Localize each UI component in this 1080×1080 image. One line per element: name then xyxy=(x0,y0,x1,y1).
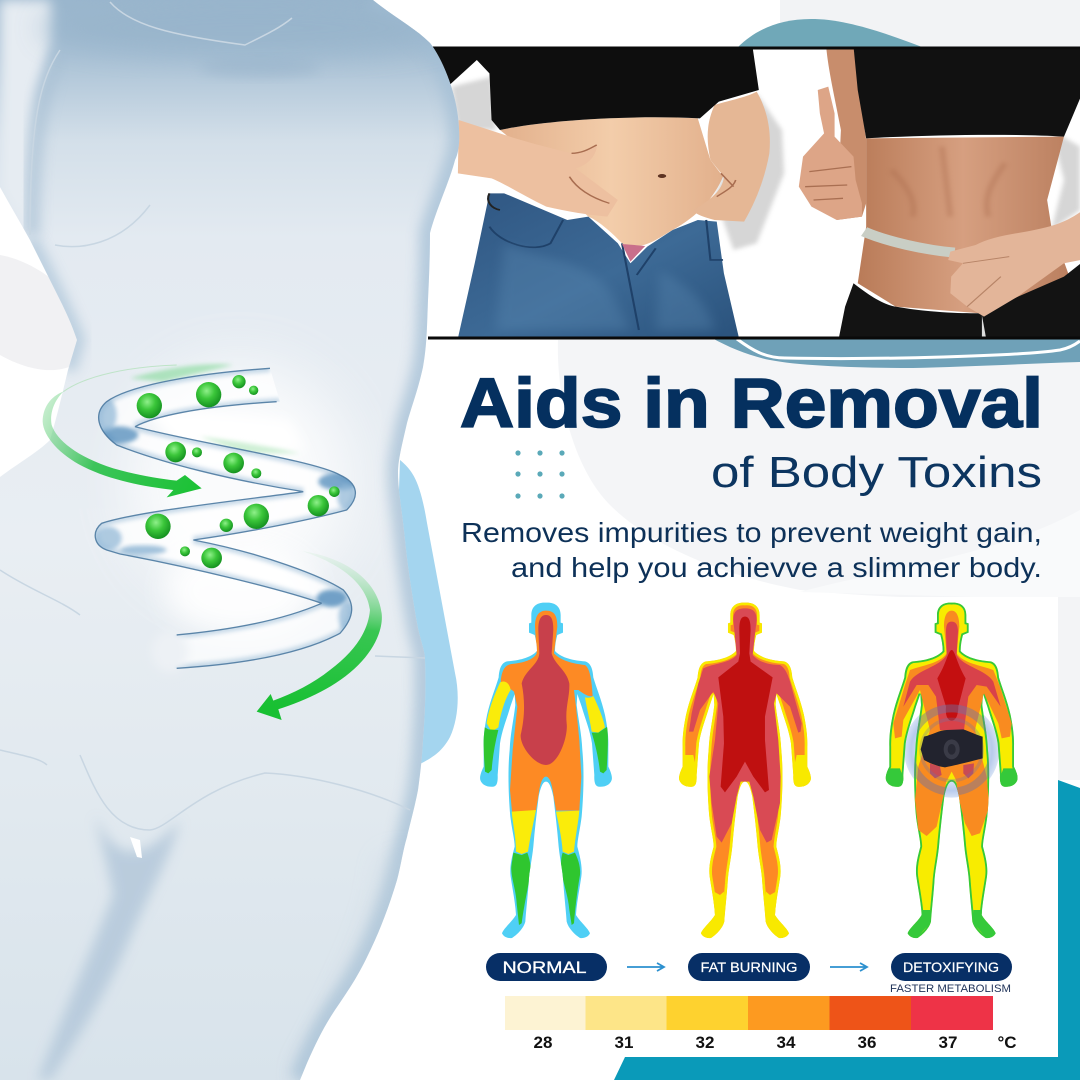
temperature scale labels: 32 xyxy=(696,1033,714,1052)
temperature scale labels: 36 xyxy=(858,1033,876,1052)
label pill: detoxifying: DETOXIFYING xyxy=(903,959,999,975)
orange region xyxy=(893,611,1012,836)
body illustration: pale blue female torso xyxy=(0,0,460,1080)
red outer region xyxy=(689,608,802,843)
dark red core xyxy=(937,650,966,721)
red hip remnants xyxy=(930,763,974,778)
dark red core xyxy=(718,617,773,792)
description text: and help you achievve a slimmer body. xyxy=(511,552,1042,583)
figure: right woman's black pants xyxy=(839,263,1080,338)
vibration rings over body xyxy=(910,708,993,792)
right side body edge shading xyxy=(300,0,459,1080)
leg crease shadow xyxy=(38,815,180,1080)
label pill: fat burning: FAT BURNING xyxy=(700,959,798,975)
slimming belt xyxy=(921,729,983,767)
arrow: upper green arrow xyxy=(43,364,300,497)
yellow hands and shins xyxy=(678,755,812,940)
green limbs xyxy=(483,727,608,925)
figure: normal body heat map xyxy=(480,603,612,938)
label pill: normal: NORMAL xyxy=(502,958,586,977)
arm on left xyxy=(0,0,52,240)
bottom teal corner xyxy=(614,780,1080,1080)
red region xyxy=(903,622,1001,730)
figure: measuring tape xyxy=(864,232,955,253)
body crease lines xyxy=(0,2,425,830)
figure: fat burning body heat map xyxy=(678,603,812,940)
diagram: toxin spiral with green arrows xyxy=(43,364,382,720)
label pill: fat burning xyxy=(688,953,810,981)
temperature scale labels: 37 xyxy=(939,1033,957,1052)
green hands and feet xyxy=(883,768,1020,940)
figure: left woman's jeans xyxy=(458,193,739,338)
panel: white heat-map panel xyxy=(462,597,1058,1057)
temperature scale bar xyxy=(505,996,993,1030)
decorative dot grid xyxy=(515,450,565,499)
description text xyxy=(461,517,1042,583)
description text: Removes impurities to prevent weight gain, xyxy=(461,517,1042,548)
figure: detoxifying body heat map with belt xyxy=(883,603,1020,940)
figure: left woman's skin xyxy=(458,92,770,262)
temperature scale labels xyxy=(534,1033,1017,1052)
fade at lower ribbon end xyxy=(152,631,188,672)
temperature scale labels: 31 xyxy=(615,1033,633,1052)
green toxin particles xyxy=(137,375,340,568)
photo frame lines xyxy=(428,48,1080,338)
figure: right woman's arm and thumb xyxy=(799,47,866,220)
figure: right woman's hand xyxy=(948,212,1080,338)
red core region xyxy=(521,615,569,765)
label pill: detoxifying xyxy=(891,953,1012,981)
white gap between the thighs xyxy=(130,837,142,858)
figure: right woman's black top xyxy=(854,47,1080,138)
decorative blob: light blue behind body xyxy=(390,460,458,765)
arrow: lower green arrow xyxy=(257,551,382,720)
orange core region xyxy=(501,611,593,812)
photo shadow: behind left figure xyxy=(452,77,1080,250)
figure: left woman's black top xyxy=(420,47,759,130)
yellow limbs xyxy=(487,681,605,854)
decorative band: teal under photo xyxy=(712,338,1080,368)
caption: faster metabolism: FASTER METABOLISM xyxy=(890,983,1011,995)
arrow: fat burning to detoxifying xyxy=(830,963,867,971)
temperature scale labels: °C xyxy=(997,1033,1017,1052)
vibration halo behind body xyxy=(904,702,999,798)
figure: right woman's torso xyxy=(858,137,1068,313)
arrow: normal to fat burning xyxy=(627,963,664,971)
photo: before and after waist comparison xyxy=(420,47,1080,338)
temperature scale labels: 28 xyxy=(534,1033,552,1052)
title: Aids in Removal xyxy=(460,364,1043,442)
subtitle: of Body Toxins xyxy=(711,448,1042,497)
label pill: normal xyxy=(486,953,607,981)
spiral: translucent blue ribbon xyxy=(95,368,358,672)
temperature scale labels: 34 xyxy=(777,1033,796,1052)
decorative blob: teal behind photo top xyxy=(738,19,922,47)
